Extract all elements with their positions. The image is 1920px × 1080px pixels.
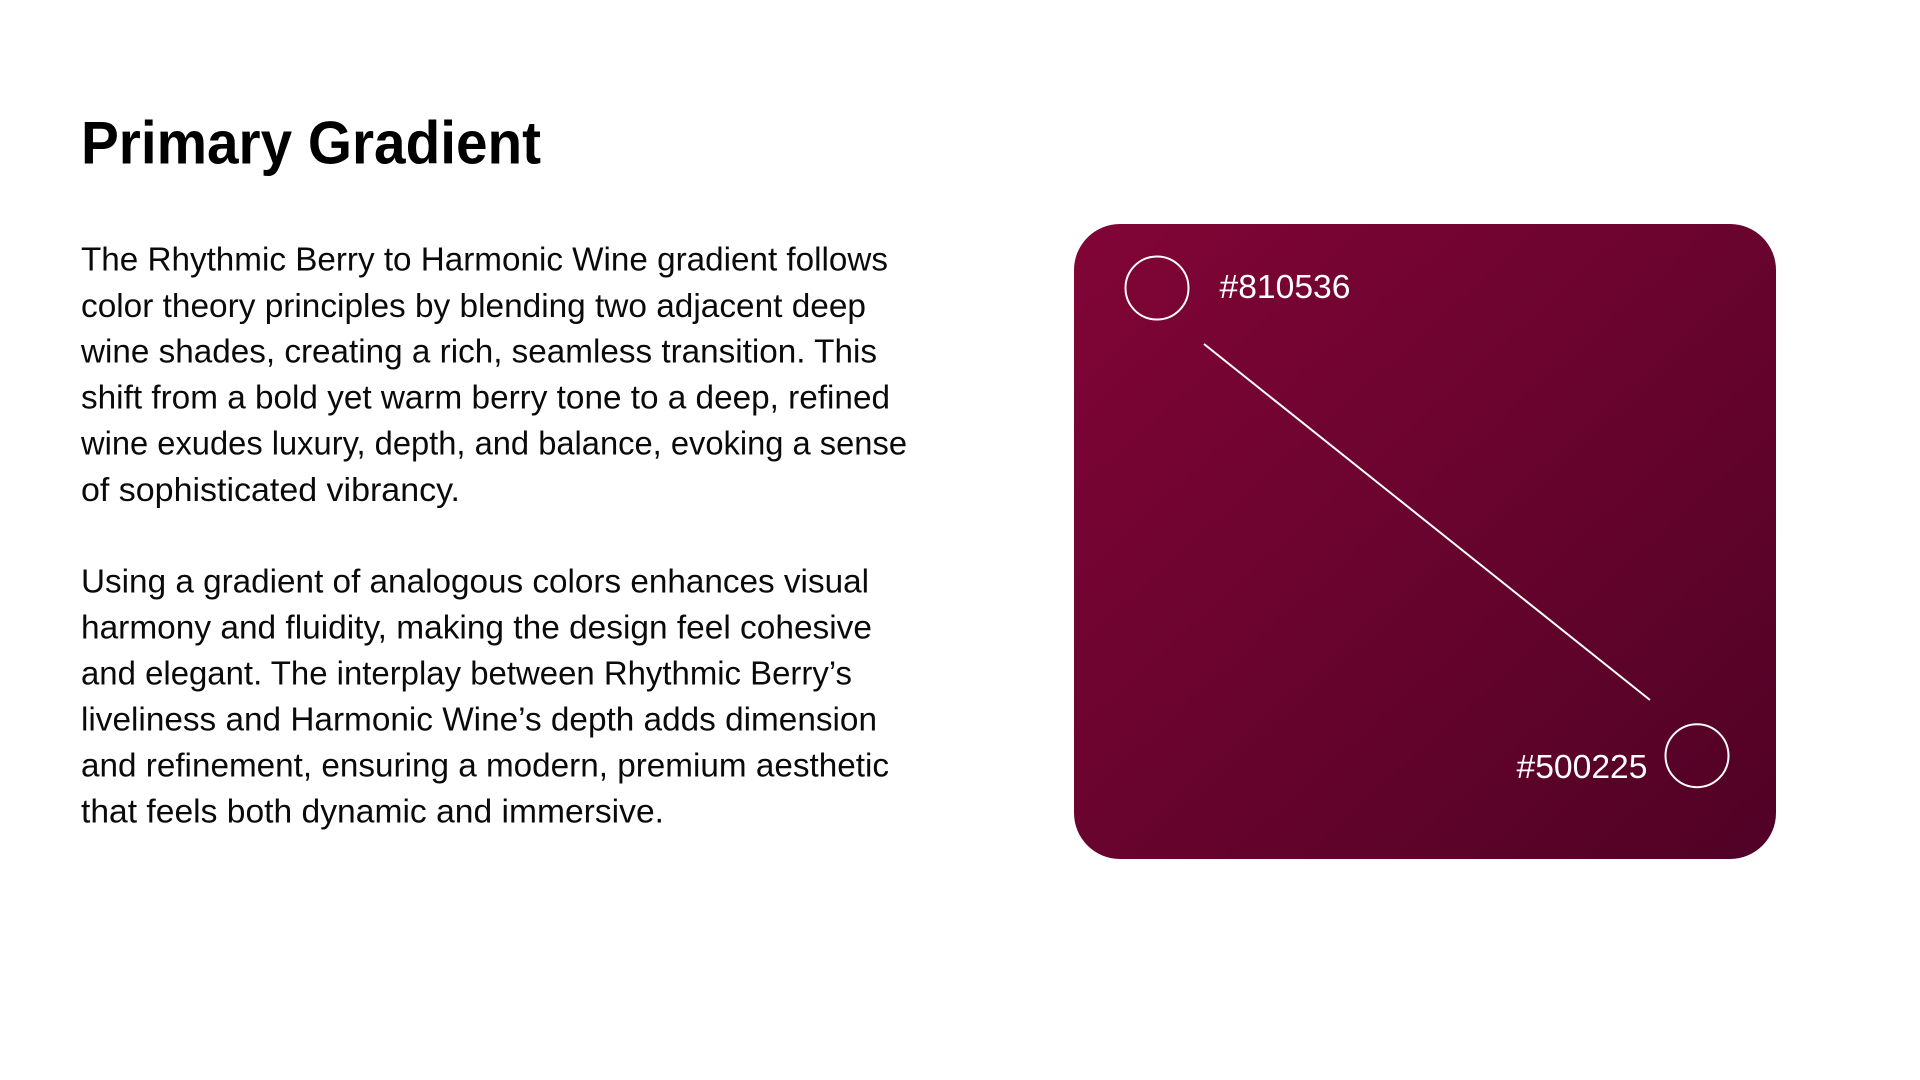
text block: first paragraph: shift from a bold yet warm berry tone to a deep, refined	[81, 378, 890, 416]
text block: first paragraph: The Rhythmic Berry to Harmonic Wine gradient follows	[81, 240, 888, 278]
text block: first paragraph: of sophisticated vibrancy.	[81, 471, 460, 508]
icon: end colour circle	[1666, 724, 1728, 787]
arrow: gradient direction line	[1204, 344, 1650, 700]
text block: second paragraph: Using a gradient of analogous colors enhances visual	[81, 562, 869, 600]
text block: second paragraph: and elegant. The interplay between Rhythmic Berry’s	[81, 654, 852, 692]
text block: second paragraph: liveliness and Harmonic Wine’s depth adds dimension	[81, 700, 877, 738]
text block: first paragraph: wine shades, creating a rich, seamless transition. This	[80, 332, 877, 370]
title: Primary Gradient	[81, 110, 541, 176]
panel: gradient swatch	[1074, 224, 1776, 859]
text block: first paragraph	[80, 240, 907, 508]
text block: first paragraph: color theory principles by blending two adjacent deep	[81, 287, 866, 324]
text block: second paragraph	[81, 562, 889, 830]
text block: first paragraph: wine exudes luxury, depth, and balance, evoking a sense	[80, 424, 907, 462]
gradient card background	[1074, 224, 1776, 859]
label: end colour hex: #500225	[1516, 748, 1648, 785]
label: start colour hex: #810536	[1220, 268, 1350, 305]
text block: second paragraph: harmony and fluidity, making the design feel cohesive	[81, 608, 872, 646]
icon: start colour circle	[1126, 256, 1188, 320]
text block: second paragraph: that feels both dynamic and immersive.	[81, 792, 664, 830]
text block: second paragraph: and refinement, ensuring a modern, premium aesthetic	[81, 746, 889, 784]
